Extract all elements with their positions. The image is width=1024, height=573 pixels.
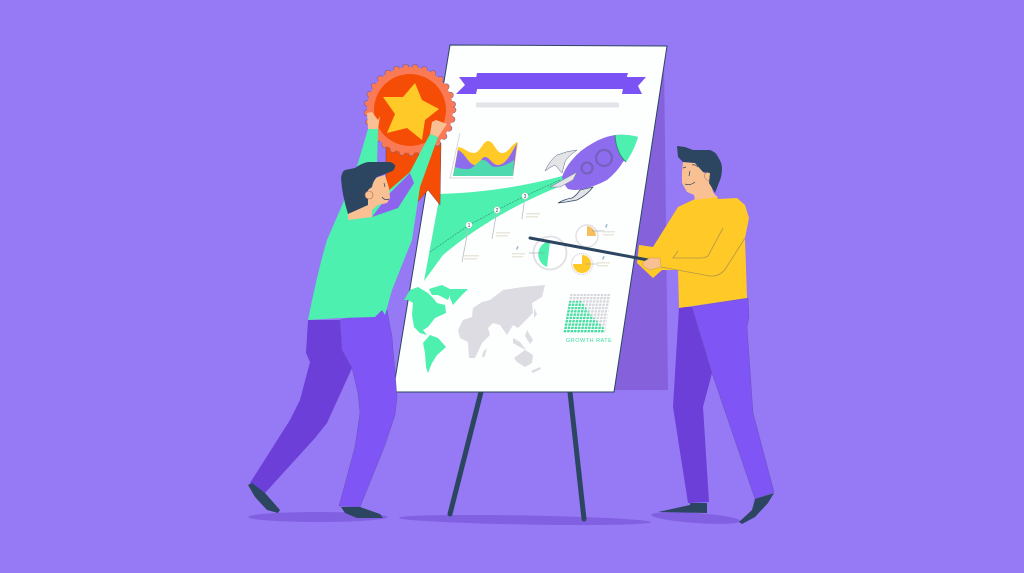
rocket body — [562, 135, 638, 190]
timeline line with nodes: 3 — [524, 194, 527, 200]
growth trail — [424, 175, 566, 281]
ribbon tails — [386, 143, 441, 205]
right man arm creases — [661, 228, 745, 276]
presentation board — [393, 45, 667, 392]
right man front leg — [692, 298, 774, 499]
pie chart: yellow three quarters — [572, 254, 610, 274]
timeline line with nodes: 1 — [468, 223, 471, 229]
rocket lower fin — [558, 187, 593, 203]
world map — [404, 285, 545, 373]
americas — [404, 285, 468, 373]
pointer stick — [530, 238, 648, 260]
subtitle bar — [476, 102, 619, 108]
growth rate dot grid: GROWTH RATE — [566, 338, 612, 344]
rocket portholes — [582, 150, 612, 174]
left man arm shadow — [372, 173, 414, 217]
left man head — [341, 162, 395, 220]
pie chart: large green — [512, 236, 566, 270]
rocket nose — [615, 135, 638, 162]
banner — [456, 73, 646, 94]
easel legs — [450, 392, 584, 519]
right man head — [677, 146, 722, 200]
right man back leg — [673, 307, 712, 503]
left man shoes — [248, 483, 383, 518]
right man shirt — [637, 196, 749, 308]
right man shoes — [658, 493, 774, 524]
award badge — [367, 67, 453, 153]
rocket — [545, 135, 638, 203]
left man back leg — [250, 320, 352, 493]
growth rate dot grid — [563, 294, 612, 344]
left man hands — [367, 112, 447, 137]
ground shadows — [248, 510, 741, 527]
pie chart: small quarter — [576, 224, 615, 247]
eurasia, africa and oceania — [458, 285, 545, 373]
badge star — [383, 83, 439, 140]
timeline line with nodes: 2 — [496, 208, 499, 214]
right man hand — [643, 258, 661, 270]
rocket upper fin — [545, 150, 577, 173]
board cast shadow — [610, 60, 668, 390]
timeline line with nodes — [430, 180, 560, 262]
area chart — [450, 133, 518, 178]
rocket nozzle — [550, 172, 577, 187]
left man front leg — [339, 310, 397, 507]
left man shirt — [308, 129, 438, 320]
